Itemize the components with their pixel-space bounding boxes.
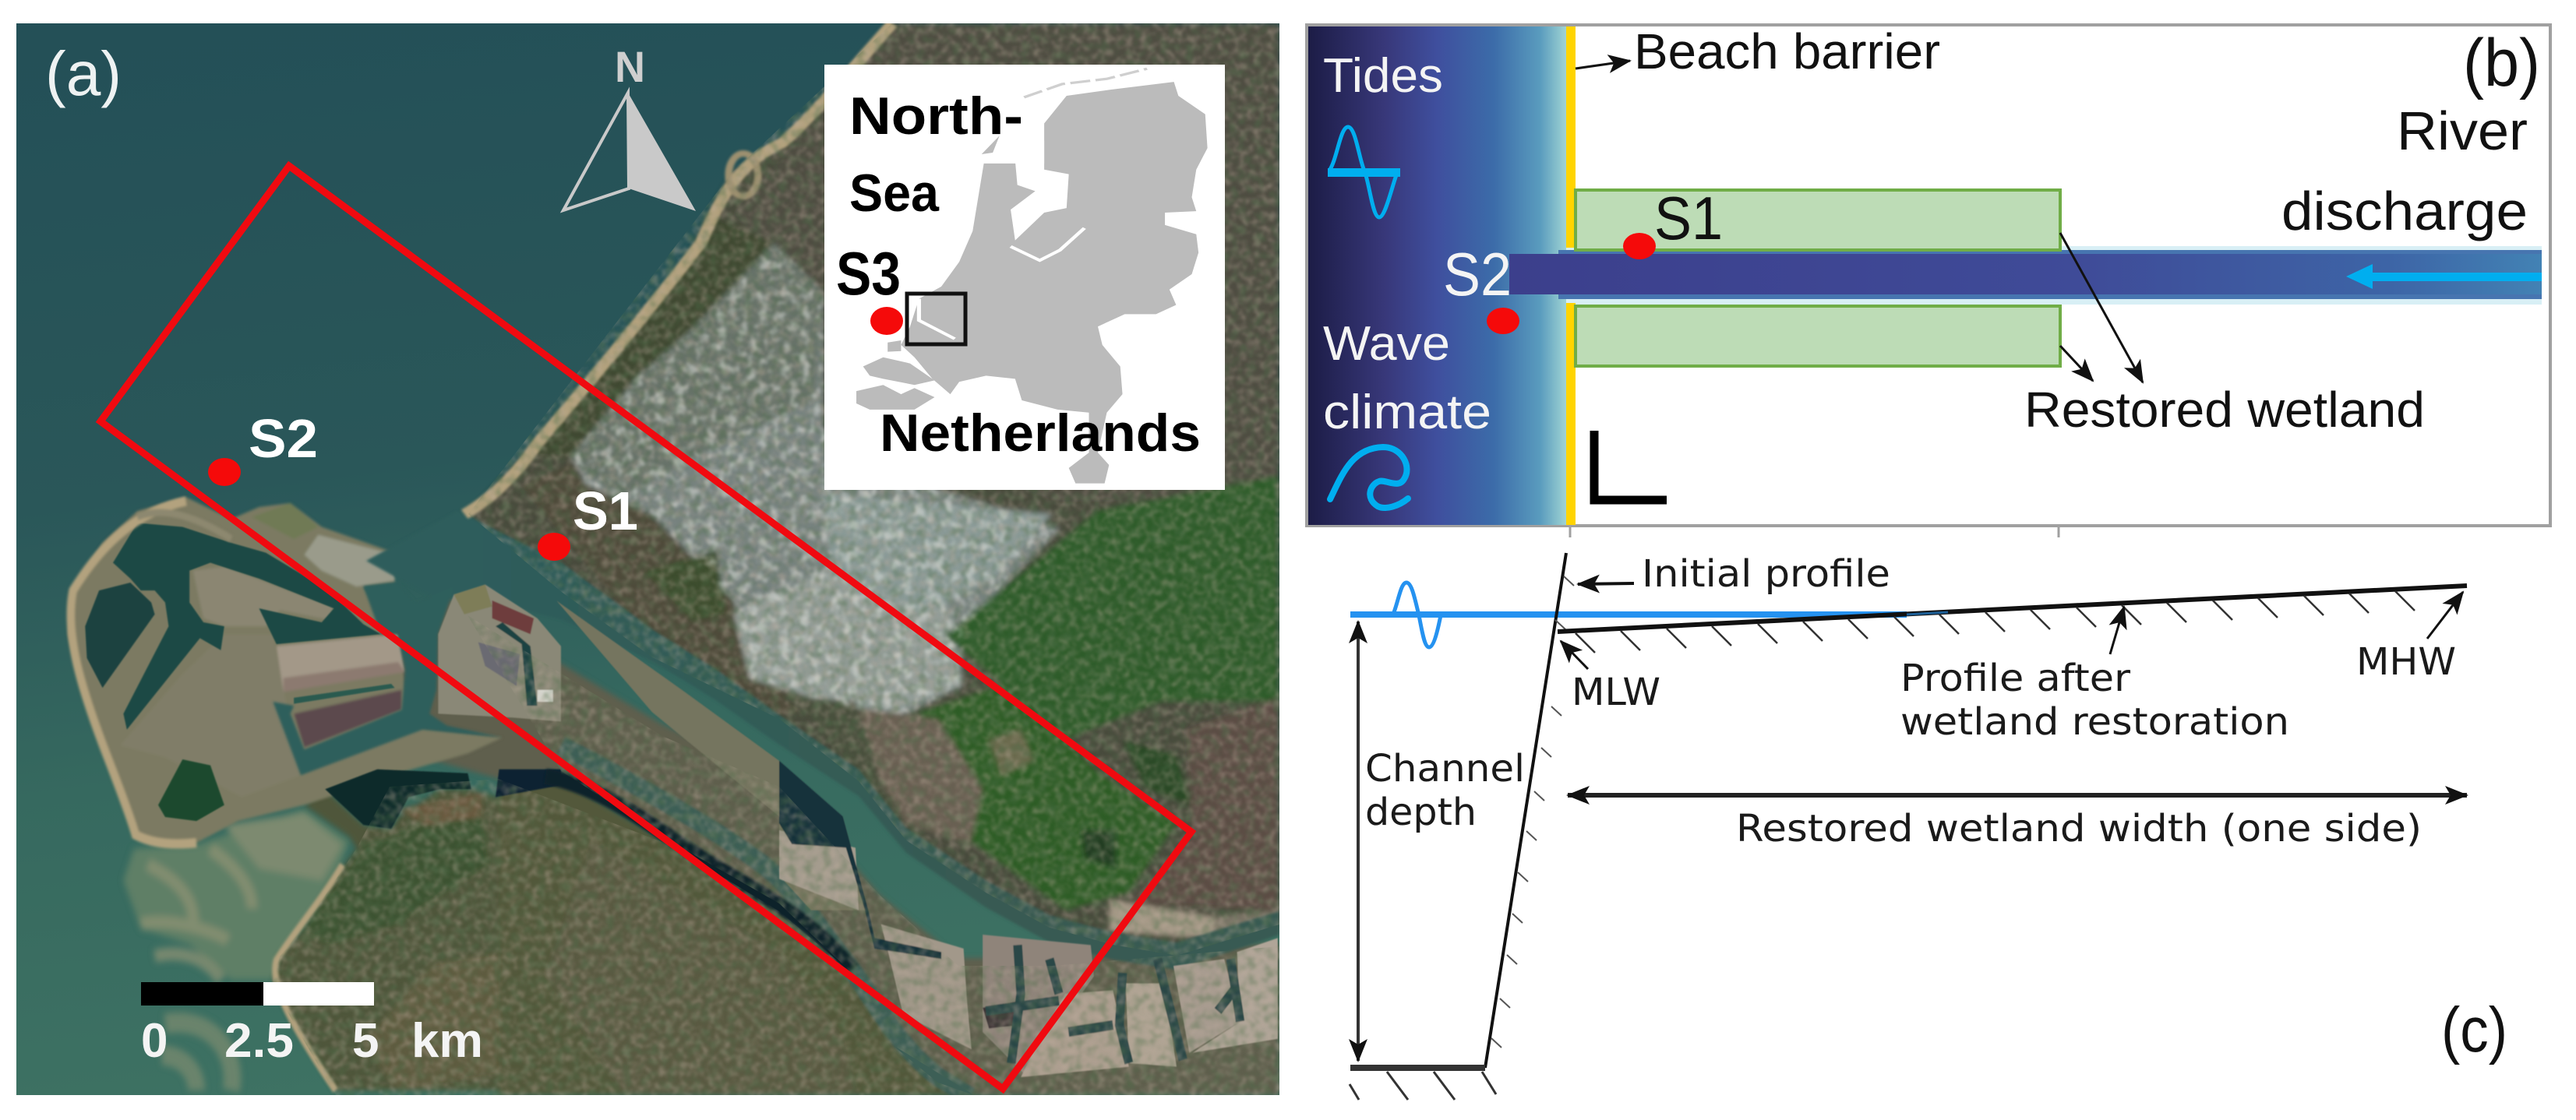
study area red rectangle (101, 166, 1191, 1089)
label: restored wetland width: Restored wetland width (one side) (1736, 807, 2422, 851)
label: (b): (b) (2463, 26, 2540, 100)
label: channel depth (1365, 747, 1525, 834)
label: beach barrier: Beach barrier (1634, 23, 1940, 79)
tank farms and city port (556, 601, 1278, 1077)
restored wetland lower (1576, 306, 2060, 366)
Maasvlakte port (68, 497, 561, 845)
arrow: river discharge (2346, 264, 2542, 289)
arrow: channel depth (1357, 622, 1360, 1061)
Oude Maas dark channel (545, 777, 852, 970)
arrow: profile after restoration (2110, 607, 2124, 654)
arrow: beach barrier (1576, 61, 1630, 69)
arrow: MLW (1561, 641, 1588, 669)
river channel (1509, 246, 2542, 305)
restored wetland upper (1576, 190, 2060, 250)
Netherlands shape (856, 69, 1208, 484)
port block north bank (1110, 900, 1215, 938)
north land (468, 23, 1279, 956)
icon: north arrow (563, 42, 696, 211)
label: tides: Tides (1323, 49, 1443, 103)
inset: Netherlands locator: North- (849, 86, 1023, 146)
icon: tide wave (1394, 583, 1441, 647)
beaches (71, 23, 892, 1090)
site S1: S1 (573, 481, 638, 541)
icon: tide wave (1328, 127, 1400, 217)
tick marks (1570, 527, 2059, 537)
label: profile after wetland restoration: Profile after (1900, 657, 2130, 700)
site S1 marker: S1 (1654, 184, 1723, 252)
site S2 marker: S2 (1443, 240, 1512, 308)
arrow: restored wetland width (1568, 793, 2467, 798)
label: (c): (c) (2441, 995, 2507, 1065)
label: restored wetland: Restored wetland (2024, 382, 2425, 438)
scale bar: km (411, 1014, 483, 1068)
label: wave climate (1323, 317, 1491, 439)
beach barrier strip (1566, 26, 1576, 525)
arrows: to restored wetland (2060, 233, 2143, 382)
inset: Netherlands locator: S3 (836, 239, 901, 308)
scale bar: 2.5 (224, 1014, 294, 1068)
water level (1350, 611, 1907, 618)
south land (271, 788, 500, 1093)
inset: Netherlands locator: Sea (849, 164, 940, 223)
panel: (c) cross-section profile (1350, 552, 2507, 1100)
label: river: River (2397, 100, 2528, 161)
waterway (273, 511, 1279, 1097)
label: channel depth: Channel (1365, 747, 1525, 791)
greenhouse area (570, 305, 1061, 717)
label: channel depth: depth (1365, 791, 1477, 834)
Europoort (438, 585, 561, 722)
estuary sand flats (123, 809, 350, 1090)
panel: (b) plan view model domain (1307, 23, 2550, 537)
ocean boundary gradient (1308, 26, 1566, 525)
site S1 (538, 481, 638, 561)
city port basins (986, 945, 1240, 1063)
icon: north arrow: N (615, 42, 645, 91)
label: wave climate: Wave (1323, 317, 1450, 371)
arrow: MHW (2427, 592, 2463, 639)
scale bar (141, 982, 483, 1068)
panel label (a): (a) (45, 39, 122, 108)
satellite image base (0, 0, 1325, 1120)
site S1 marker (1623, 184, 1723, 259)
dark basin (779, 761, 941, 959)
site S2: S2 (249, 408, 318, 469)
icon: length scale L (1594, 431, 1667, 500)
land texture (0, 0, 1325, 1120)
arrow: initial profile (1578, 583, 1634, 584)
panel: (a) satellite map (0, 0, 1325, 1120)
Caland and Hartel channels (273, 583, 503, 775)
label: MLW: MLW (1572, 671, 1660, 714)
site S2 (208, 408, 318, 486)
label: wave climate: climate (1323, 386, 1491, 439)
label: discharge: discharge (2281, 181, 2528, 241)
initial channel profile (1350, 553, 1574, 1100)
label: profile after wetland restoration (1900, 657, 2289, 744)
polder and urban east (779, 476, 1278, 938)
label: MHW: MHW (2356, 640, 2456, 684)
inset: Netherlands locator (824, 65, 1225, 490)
port basins (113, 523, 381, 730)
inset: Netherlands locator: Netherlands (880, 403, 1201, 463)
scale bar: 0 (141, 1014, 168, 1068)
label: initial profile: Initial profile (1642, 552, 1890, 596)
wetland profile (1558, 586, 2467, 653)
label: profile after wetland restoration: wetland restoration (1900, 700, 2289, 744)
scale bar: 5 (352, 1014, 379, 1068)
icon: breaking wave (1330, 447, 1408, 508)
port land strip (374, 592, 1279, 1095)
